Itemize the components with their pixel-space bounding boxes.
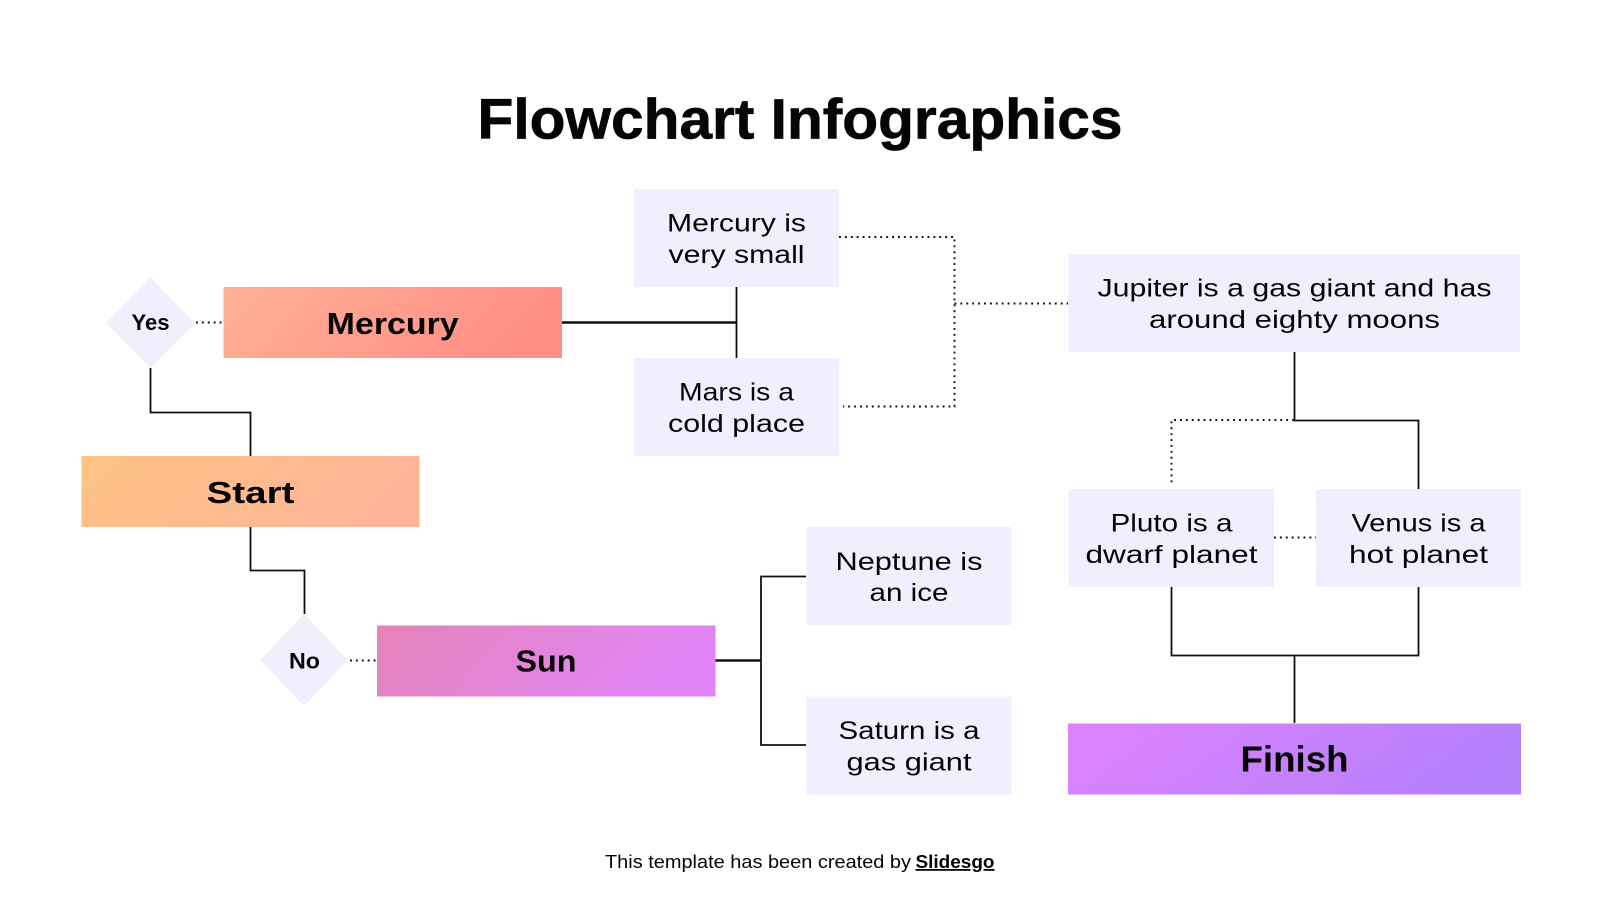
note: Pluto: dwarf planet (1086, 541, 1258, 569)
footer credit: Slidesgo (916, 852, 995, 872)
connector: Jupiter to Venus (1294, 352, 1418, 489)
note: Venus (1316, 489, 1521, 587)
box: Mercury: Mercury (327, 306, 460, 341)
dotted connector: No to Sun (350, 660, 377, 662)
note: Mercury: Mercury is (667, 210, 806, 238)
note: Pluto (1068, 489, 1274, 587)
box: Start (82, 456, 420, 527)
note: Mars: Mars is a (679, 378, 794, 406)
box: Sun (377, 626, 716, 696)
title: Flowchart Infographics (478, 88, 1122, 152)
note: Mars (634, 358, 839, 456)
note: Neptune: an ice (870, 579, 948, 607)
note: Mars: cold place (668, 410, 805, 438)
dotted connector: Pluto to Venus (1274, 536, 1316, 538)
note: Neptune: Neptune is (836, 548, 982, 576)
note: Neptune (806, 527, 1012, 625)
note: Venus: Venus is a (1352, 510, 1486, 538)
note: Saturn: Saturn is a (838, 717, 980, 745)
note: Saturn (806, 696, 1012, 794)
diamond: Yes: Yes (132, 310, 170, 335)
connector: Pluto and Venus to Finish (1172, 587, 1418, 723)
note: Saturn: gas giant (846, 748, 972, 776)
note: Jupiter: around eighty moons (1149, 306, 1440, 334)
box: Mercury (224, 287, 562, 358)
diamond: Yes (106, 278, 195, 368)
note: Mercury: very small (668, 241, 804, 269)
note: Jupiter (1068, 254, 1520, 352)
dotted connector: notes to Jupiter (839, 237, 1068, 406)
connector: Start to No (250, 527, 304, 614)
box: Finish (1068, 724, 1521, 794)
box: Finish: Finish (1240, 738, 1348, 780)
note: Mercury (634, 189, 839, 287)
note: Venus: hot planet (1349, 541, 1488, 569)
box: Start: Start (206, 475, 294, 510)
box: Sun: Sun (516, 644, 576, 678)
connector: Mercury to Mercury and Mars notes (562, 287, 736, 358)
footer credit: This template has been created by (605, 852, 911, 872)
connector: Yes to Start (150, 368, 250, 456)
dotted connector: Yes to Mercury (196, 322, 223, 324)
diamond: No (260, 614, 348, 706)
note: Pluto: Pluto is a (1110, 510, 1233, 538)
connector: Sun to Neptune and Saturn notes (715, 576, 806, 745)
dotted connector: Jupiter to Pluto (1172, 420, 1294, 485)
note: Jupiter: Jupiter is a gas giant and has (1098, 274, 1492, 302)
diamond: No: No (289, 648, 320, 674)
